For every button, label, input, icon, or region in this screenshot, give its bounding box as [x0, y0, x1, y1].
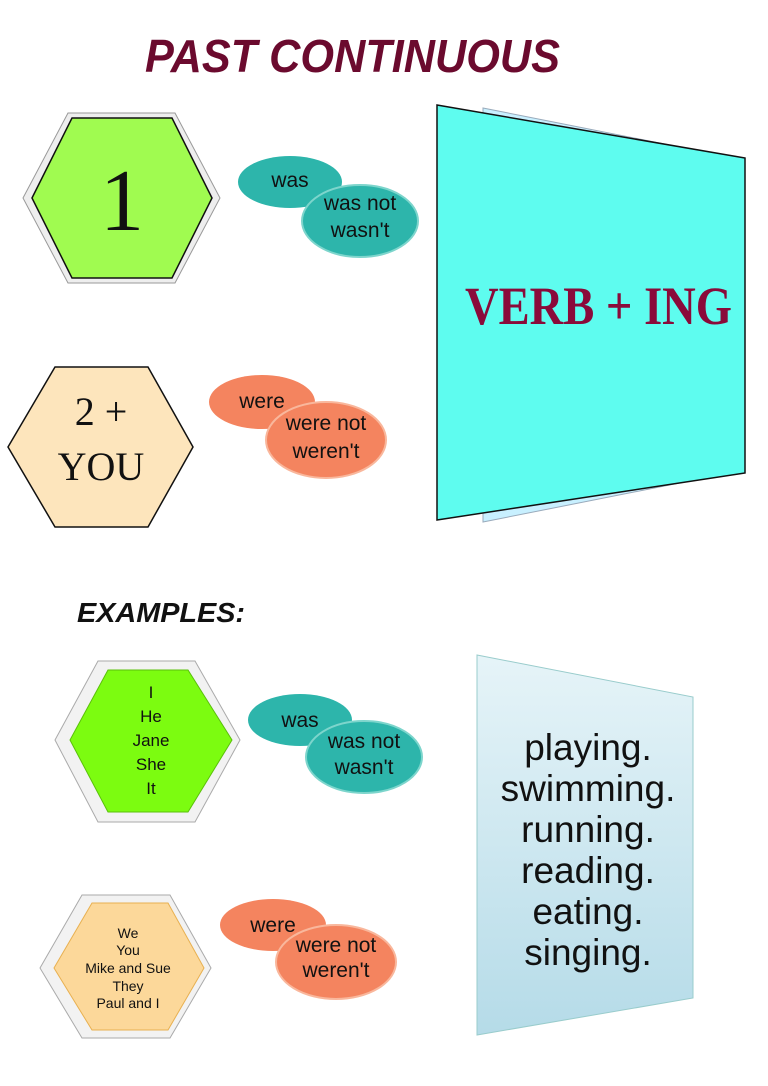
bubbles: was: [238, 156, 418, 257]
hexagon: 2 + YOU: 2 +: [75, 389, 127, 434]
hexagon: singular subjects: [55, 661, 240, 822]
panel: VERB + ING: VERB + ING: [465, 276, 732, 336]
hexagon: plural subjects: You: [116, 942, 140, 958]
panel: verb examples: [477, 655, 693, 1035]
heading: examples: EXAMPLES:: [77, 597, 245, 628]
hexagon: plural subjects: Paul and I: [96, 995, 160, 1011]
bubbles: were (example): were: [249, 914, 296, 937]
hexagon: singular subjects: I: [149, 683, 153, 702]
hexagon: 2 + YOU: YOU: [58, 444, 144, 489]
bubbles: were (example): were not: [295, 934, 376, 957]
hexagon: singular subjects: He: [140, 707, 162, 726]
panel: verb examples: swimming.: [501, 768, 675, 809]
bubbles: were: [209, 375, 386, 478]
panel: verb examples: eating.: [532, 891, 644, 932]
hexagon: singular subjects: Jane: [133, 731, 169, 750]
hexagon: plural subjects: Mike and Sue: [85, 960, 171, 976]
bubbles: were (example): weren't: [301, 959, 370, 982]
hexagon: 1: 1: [100, 153, 144, 250]
bubbles: was (example): was: [280, 709, 319, 732]
bubbles: were: were not: [285, 412, 366, 435]
hexagon: singular subjects: She: [136, 755, 166, 774]
panel: verb examples: reading.: [521, 850, 655, 891]
panel: verb examples: singing.: [524, 932, 652, 973]
hexagon: 1: [23, 113, 220, 283]
bubbles: was (example): was not: [327, 730, 400, 753]
bubbles: was (example): wasn't: [334, 756, 394, 779]
bubbles: was: was not: [323, 192, 396, 215]
bubbles: were (example): [220, 899, 396, 999]
hexagon: singular subjects: It: [146, 779, 156, 798]
bubbles: was: was: [270, 169, 309, 192]
bubbles: was: wasn't: [330, 219, 390, 242]
bubbles: was (example): [248, 694, 422, 793]
hexagon: plural subjects: [40, 895, 211, 1038]
panel: verb examples: playing.: [524, 727, 652, 768]
hexagon: plural subjects: They: [112, 978, 144, 994]
panel: verb examples: running.: [521, 809, 655, 850]
title: PAST CONTINUOUS: [145, 30, 560, 82]
panel: VERB + ING: [437, 105, 745, 522]
hexagon: 2 + YOU: [8, 367, 193, 527]
hexagon: plural subjects: We: [118, 925, 139, 941]
bubbles: were: were: [238, 390, 285, 413]
bubbles: were: weren't: [291, 440, 360, 463]
